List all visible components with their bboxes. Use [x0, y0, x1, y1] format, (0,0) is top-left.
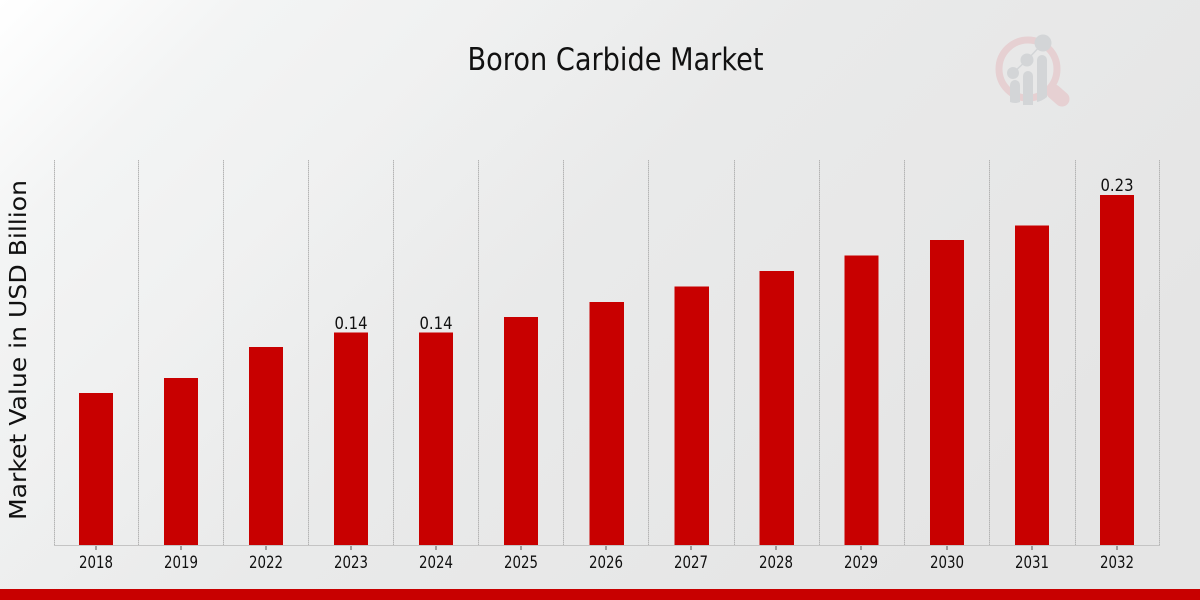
chart gridlines and axis: [54, 160, 1160, 550]
x-axis year labels: 2025: [504, 553, 538, 572]
x-axis year labels: 2019: [164, 553, 198, 572]
x-axis year labels: 2022: [249, 553, 283, 572]
x-axis year labels: 2026: [589, 553, 623, 572]
bottom red band: [0, 589, 1200, 600]
value labels: 0.14: [334, 314, 368, 334]
x-axis year labels: 2029: [844, 553, 878, 572]
value labels: [334, 176, 1134, 334]
x-axis year labels: [79, 553, 1134, 572]
x-axis year labels: 2018: [79, 553, 113, 572]
x-axis year labels: 2027: [674, 553, 708, 572]
x-axis year labels: 2023: [334, 553, 368, 572]
value labels: 0.23: [1100, 176, 1134, 196]
icon: magnifier logo: [999, 34, 1062, 105]
x-axis year labels: 2024: [419, 553, 453, 572]
x-axis year labels: 2032: [1100, 553, 1134, 572]
bar chart: [79, 195, 1134, 545]
title: Boron Carbide Market: [468, 42, 764, 78]
y-axis label: Market Value in USD Billion: [4, 180, 32, 520]
x-axis year labels: 2028: [759, 553, 793, 572]
value labels: 0.14: [420, 314, 452, 334]
x-axis year labels: 2030: [930, 553, 964, 572]
x-axis year labels: 2031: [1015, 553, 1049, 572]
